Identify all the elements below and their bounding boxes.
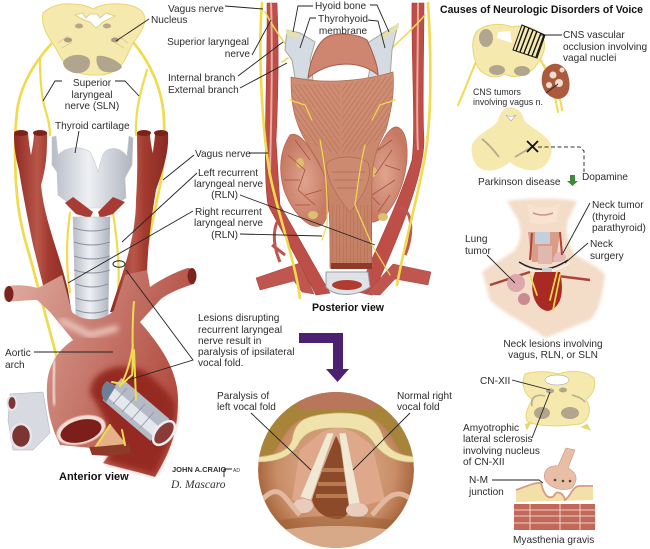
signature [170, 465, 240, 491]
recurrent laryngeal nerve around arch [97, 261, 136, 445]
trachea [73, 217, 110, 320]
label: aortic arch: arch [5, 360, 25, 371]
callout: lesions disrupting recurrent laryngeal nerve: recurrent laryngeal [198, 325, 282, 336]
thyroid gland lobes [281, 127, 407, 226]
label: vagus nerve, top: Vagus nerve [168, 4, 224, 15]
label: nucleus: Nucleus [151, 15, 187, 26]
label: thyrohyoid membrane [300, 14, 385, 48]
label: amyotrophic lateral sclerosis: involving nucleus [463, 446, 540, 457]
label: CN-XII [480, 376, 550, 390]
label: aortic arch: Aortic [5, 348, 31, 359]
tumor [542, 64, 570, 99]
label: nucleus [116, 15, 187, 41]
label: superior laryngeal nerve (SLN) [43, 78, 139, 112]
label: N-M junction: N-M [469, 475, 488, 486]
icon: green down arrow [567, 175, 578, 186]
label: CNS vascular occlusion: occlusion involving [563, 42, 647, 53]
brainstem with CN-XII nucleus [523, 371, 595, 429]
label: thyroid cartilage [55, 121, 130, 153]
label: lung tumor [465, 234, 515, 283]
label: dopamine: Dopamine [582, 172, 628, 183]
hyoid bone and thyrohyoid membrane [285, 23, 399, 80]
callout: lesions disrupting recurrent laryngeal nerve: vocal fold. [198, 358, 243, 369]
label: neck tumor: Neck tumor [592, 200, 644, 211]
label: thyrohyoid membrane: Thyrohyoid [318, 14, 368, 25]
circular larynx view [258, 392, 415, 549]
label: neck tumor: (thyroid [592, 212, 626, 223]
label: superior laryngeal nerve: nerve [225, 49, 250, 60]
label: CNS tumors: involving vagus n. [473, 97, 543, 107]
label: amyotrophic lateral sclerosis: of CN-XII [463, 457, 505, 468]
label: hyoid bone [293, 1, 389, 32]
signature: D. Mascaro [170, 479, 226, 491]
label: aortic arch [5, 348, 113, 371]
label: lung tumor: Lung [465, 234, 487, 245]
label: neck surgery [565, 239, 625, 263]
label: CNS vascular occlusion: CNS vascular [563, 30, 625, 41]
label: amyotrophic lateral sclerosis [463, 392, 550, 468]
label: internal and external branch [168, 42, 287, 96]
label: vagus nerve, top [168, 4, 263, 15]
label: superior laryngeal nerve [167, 20, 271, 60]
label: hyoid bone: Hyoid bone [315, 1, 366, 12]
label: amyotrophic lateral sclerosis: Amyotrophic [463, 423, 519, 434]
label: right recurrent laryngeal nerve (RLN): (RLN) [211, 230, 238, 241]
panel: posterior view [68, 1, 431, 314]
label: right recurrent laryngeal nerve (RLN) [68, 207, 322, 283]
label: vagus nerve, middle [163, 149, 268, 180]
heading: anterior view: Anterior view [59, 471, 129, 483]
label: normal right vocal fold: Normal right [397, 391, 452, 402]
label: CN-XII: CN-XII [480, 376, 510, 387]
label: paralysis of left vocal fold: left vocal fold [217, 402, 276, 413]
caption: myasthenia gravis: Myasthenia gravis [513, 535, 594, 546]
label: right recurrent laryngeal nerve (RLN): laryngeal nerve [194, 218, 263, 229]
label: amyotrophic lateral sclerosis: lateral sclerosis [463, 434, 533, 445]
signature: AD [233, 468, 240, 474]
label: right recurrent laryngeal nerve (RLN): Right recurrent [195, 207, 262, 218]
label: neck tumor: parathyroid) [592, 223, 646, 234]
callout: lesions disrupting recurrent laryngeal nerve: nerve result in [198, 336, 261, 347]
heading: posterior view: Posterior view [312, 302, 384, 314]
carotid arteries [14, 130, 168, 315]
laryngeal muscles and trachea [291, 72, 393, 294]
label: neck tumor [563, 200, 646, 253]
neck dissection illustration [482, 199, 605, 338]
signature: JOHN A.CRAIG [172, 465, 226, 474]
label: left recurrent laryngeal nerve (RLN): laryngeal nerve [194, 179, 263, 190]
Parkinson disease brainstem [472, 107, 552, 171]
bronchi [8, 381, 179, 450]
thyroid cartilage [52, 136, 133, 218]
vagus nerves and superior laryngeal nerve branches [15, 42, 164, 358]
label: paralysis of left vocal fold [217, 391, 311, 470]
label: left recurrent laryngeal nerve (RLN): (RLN) [211, 190, 238, 201]
label: CNS vascular occlusion: vagal nuclei [563, 53, 616, 64]
label: normal right vocal fold [353, 391, 452, 470]
epiglottis [308, 34, 378, 78]
label: Parkinson disease: Parkinson disease [478, 177, 561, 188]
caption: neck lesions: vagus, RLN, or SLN [508, 350, 598, 361]
panel: causes of neurologic disorders of voice [440, 4, 647, 546]
panel: laryngoscopic view of vocal folds [217, 391, 452, 549]
heading: Causes of Neurologic Disorders of Voice [440, 4, 643, 16]
neuromuscular junction illustration [514, 448, 595, 530]
label: thyrohyoid membrane: membrane [319, 26, 368, 37]
label: left recurrent laryngeal nerve (RLN): Left recurrent [198, 168, 258, 179]
label: lung tumor: tumor [465, 246, 491, 257]
label: neck surgery: Neck [590, 239, 614, 250]
caption: neck lesions: Neck lesions involving [503, 339, 603, 350]
label: N-M junction: junction [468, 487, 504, 498]
label: CNS vascular occlusion [540, 30, 647, 64]
label: CNS tumors [473, 84, 558, 107]
label: paralysis of left vocal fold: Paralysis of [217, 391, 269, 402]
vessels and vagus nerves [256, 3, 431, 298]
label: internal and external branch: External branch [168, 85, 239, 96]
aortic arch and great vessels [4, 268, 196, 477]
panel: anterior view [4, 4, 240, 491]
label: normal right vocal fold: vocal fold [397, 402, 440, 413]
label: neck surgery: surgery [590, 251, 625, 262]
label: superior laryngeal nerve (SLN): laryngeal [72, 90, 112, 101]
label: superior laryngeal nerve: Superior laryngeal [167, 37, 249, 48]
brainstem cross-section [42, 4, 145, 75]
label: N-M junction [468, 475, 543, 498]
small laryngeal nerves [290, 100, 395, 275]
callout: lesions disrupting recurrent laryngeal nerve [126, 270, 294, 380]
vascular occlusion brainstem [458, 24, 562, 112]
arrow: purple elbow [299, 333, 349, 382]
label: superior laryngeal nerve (SLN): nerve (SLN) [65, 101, 119, 112]
label: internal and external branch: Internal branch [168, 73, 235, 84]
callout: lesions disrupting recurrent laryngeal nerve: Lesions disrupting [198, 313, 279, 324]
label: thyroid cartilage: Thyroid cartilage [55, 121, 130, 132]
dopamine pathway with blocked X [527, 141, 584, 172]
caption: neck lesions [503, 339, 603, 361]
callout: lesions disrupting recurrent laryngeal nerve: paralysis of ipsilateral [198, 347, 294, 358]
label: CNS tumors: CNS tumors [473, 87, 522, 97]
label: left recurrent laryngeal nerve (RLN) [122, 168, 375, 245]
label: superior laryngeal nerve (SLN): Superior [73, 78, 112, 89]
label: vagus nerve, middle: Vagus nerve [195, 149, 251, 160]
